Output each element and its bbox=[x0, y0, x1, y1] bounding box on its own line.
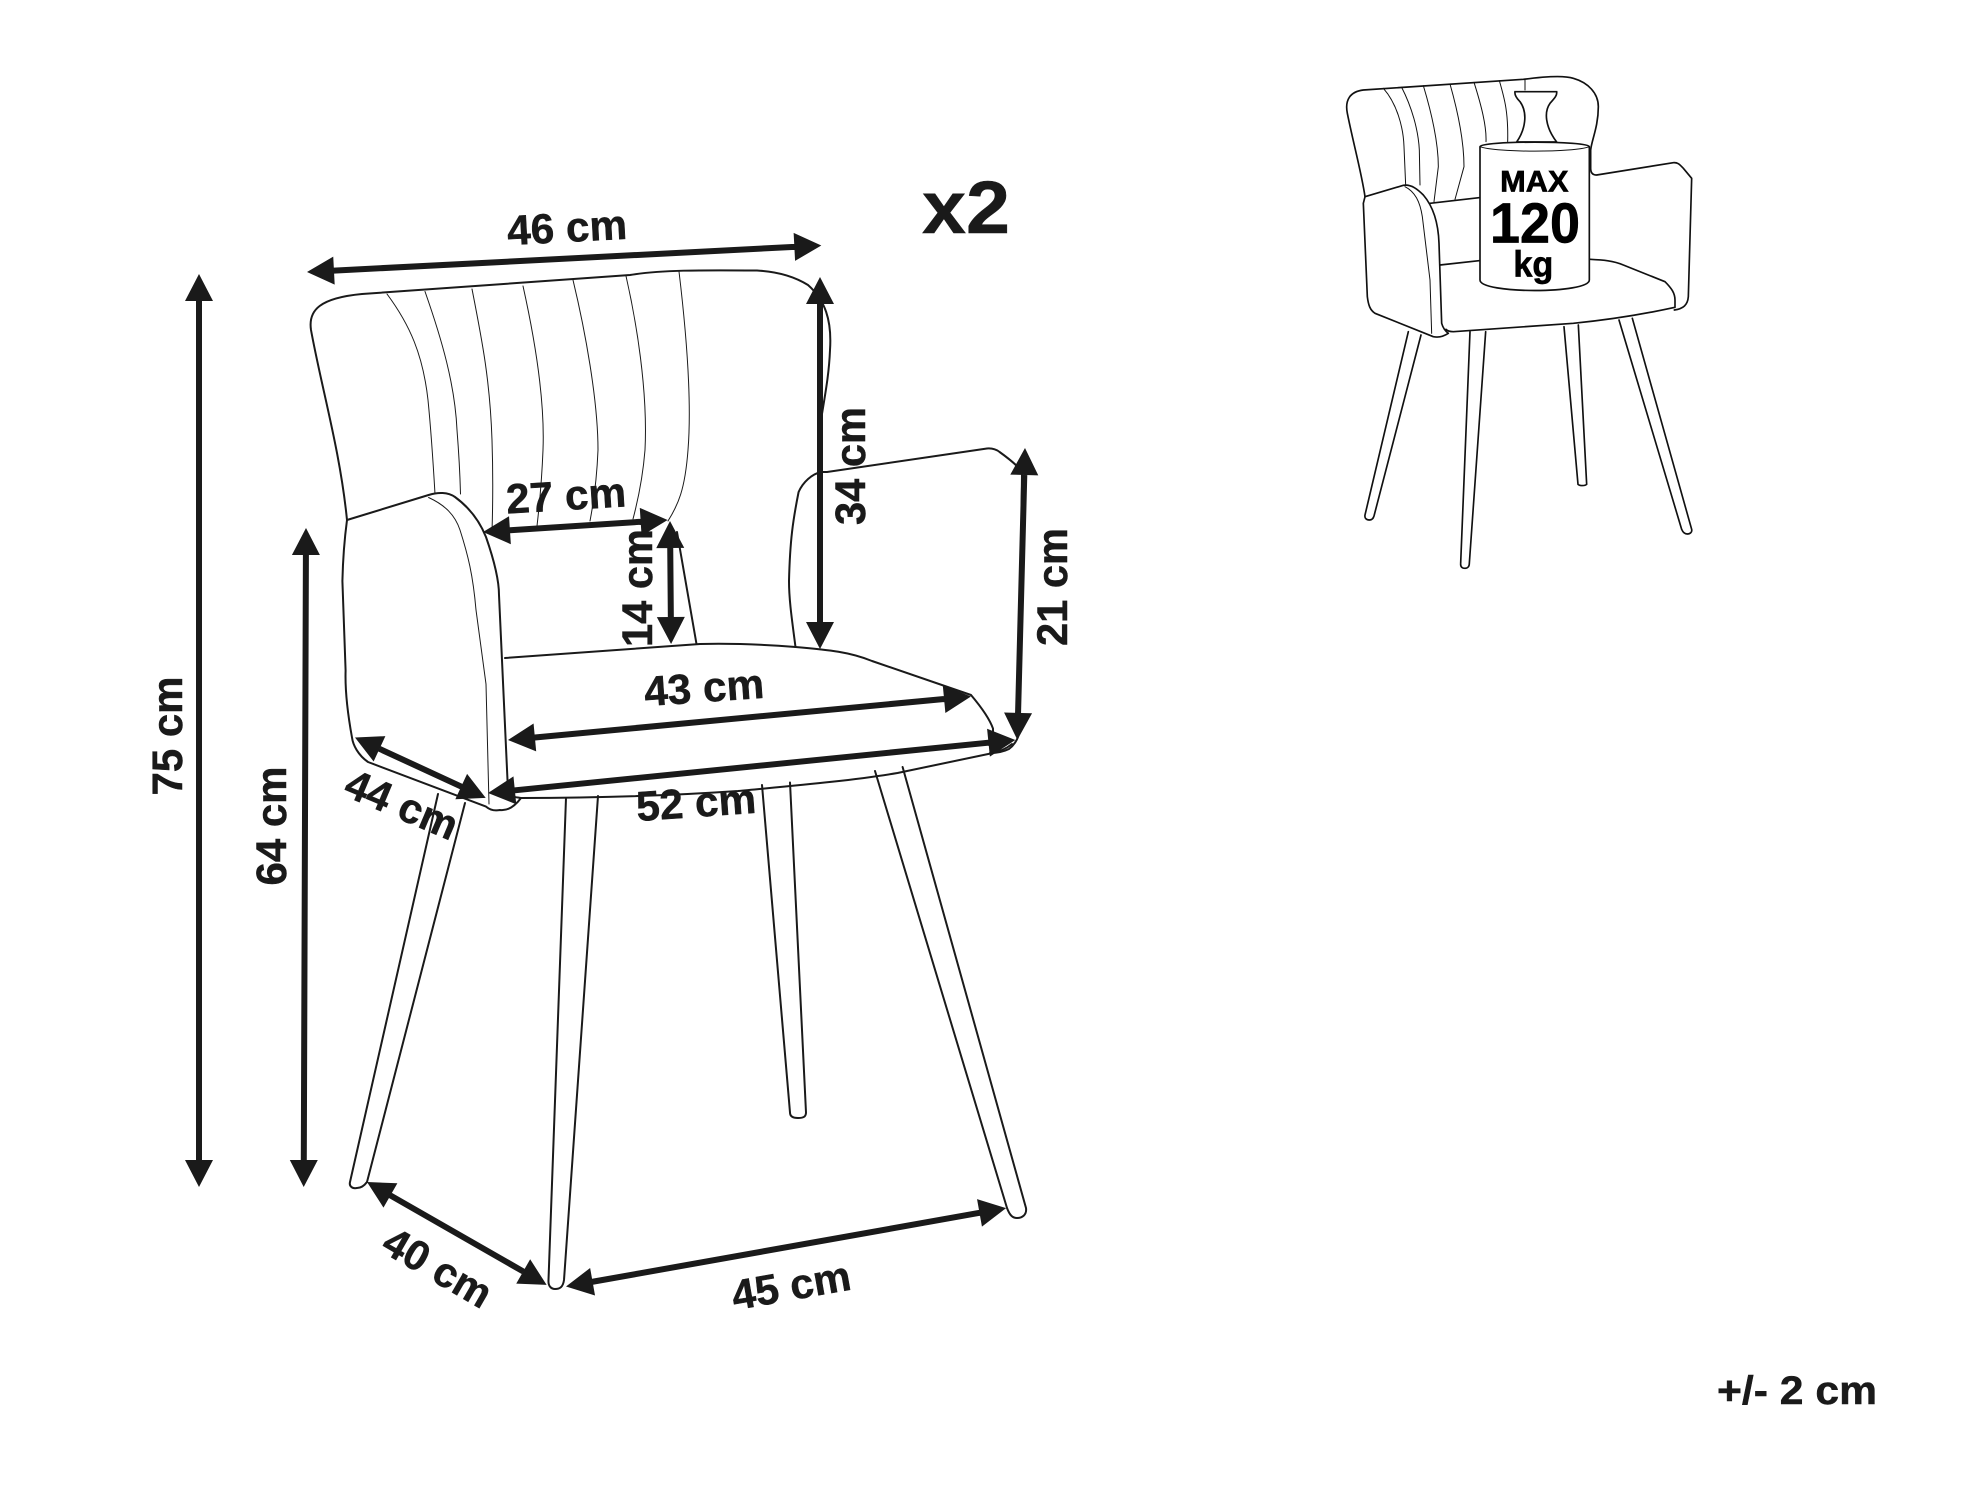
dimension label: 64 cm: 64 cm bbox=[248, 766, 296, 886]
dimension label: 46 cm: 46 cm bbox=[506, 201, 628, 254]
dimension label: 40 cm: 40 cm bbox=[375, 1218, 501, 1317]
dimension arrow: 45 cm bbox=[564, 1194, 1009, 1300]
small chair outline bbox=[1347, 76, 1692, 568]
dimension arrow: 52 cm bbox=[487, 726, 1017, 807]
dimension label: 27 cm: 27 cm bbox=[505, 468, 627, 523]
vase weight bbox=[1480, 92, 1589, 290]
back lower edge bbox=[677, 532, 696, 644]
main chair line drawing bbox=[311, 270, 1026, 1289]
load label: 120: 120 bbox=[1490, 193, 1580, 256]
chair backrest bbox=[311, 270, 830, 532]
dimension arrow: 34 cm bbox=[806, 277, 834, 649]
dimension arrow: 75 cm bbox=[185, 274, 213, 1187]
dimension label: 34 cm: 34 cm bbox=[827, 407, 875, 525]
left front leg bbox=[350, 794, 465, 1188]
dimension label: 52 cm: 52 cm bbox=[635, 775, 758, 830]
dimension label: 21 cm: 21 cm bbox=[1029, 528, 1077, 646]
load label: kg: kg bbox=[1513, 244, 1553, 285]
front leg bbox=[548, 796, 598, 1289]
back leg bbox=[762, 782, 806, 1118]
dimension arrow: 64 cm bbox=[290, 528, 320, 1187]
dimension arrow: 46 cm bbox=[306, 232, 822, 286]
dimension arrow: 40 cm bbox=[360, 1170, 554, 1297]
tolerance note: +/- 2 cm bbox=[1717, 1369, 1877, 1413]
dimension label: 44 cm: 44 cm bbox=[338, 760, 465, 849]
dimension label: 45 cm: 45 cm bbox=[728, 1252, 854, 1319]
load label: MAX: MAX bbox=[1500, 166, 1568, 199]
dimension arrow: 44 cm bbox=[349, 725, 492, 811]
dimension arrow: 27 cm bbox=[482, 506, 669, 546]
left armrest bbox=[342, 493, 521, 810]
dimension label: 14 cm: 14 cm bbox=[614, 529, 662, 647]
seat cushion bbox=[505, 644, 1012, 798]
dimension label: 43 cm: 43 cm bbox=[643, 660, 766, 715]
right armrest bbox=[789, 448, 1022, 753]
small chair with maximum load icon bbox=[1347, 76, 1692, 568]
dimension arrow: 43 cm bbox=[507, 683, 972, 754]
quantity label: x2: x2 bbox=[922, 166, 1010, 249]
dimension arrow: 21 cm bbox=[1003, 448, 1039, 740]
dimension arrow: 14 cm bbox=[656, 521, 685, 644]
dimension label: 75 cm: 75 cm bbox=[144, 676, 192, 796]
right front leg bbox=[875, 767, 1026, 1218]
